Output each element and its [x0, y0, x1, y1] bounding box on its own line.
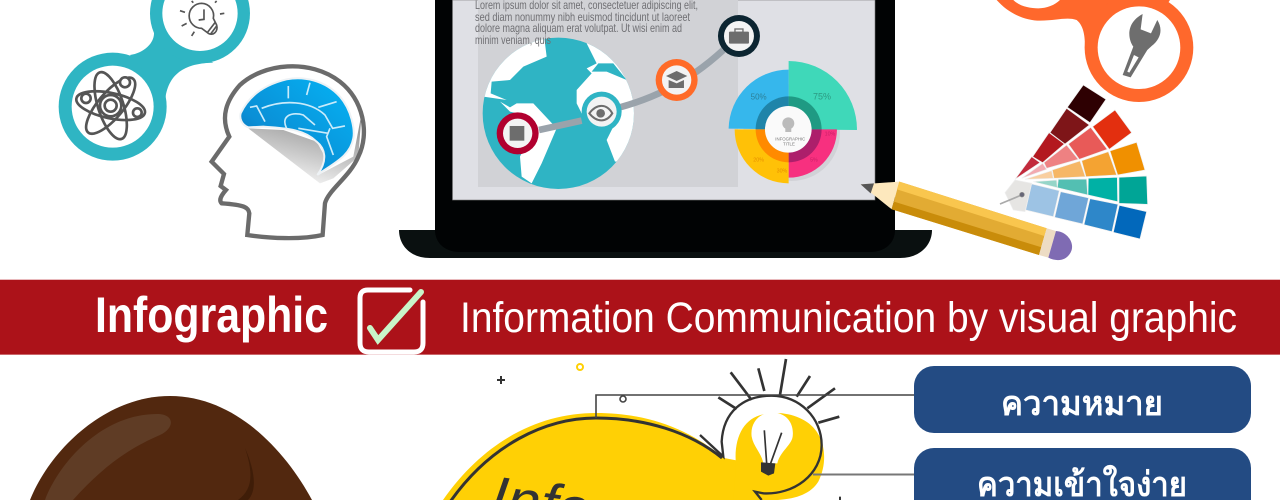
hair: [30, 396, 312, 500]
pie chart: [729, 61, 857, 183]
screen: [452, 0, 875, 200]
head outline: [212, 66, 364, 238]
pie chart: 10%: [825, 132, 836, 138]
pie chart: 5%: [810, 157, 818, 163]
head with brain: [212, 66, 364, 238]
icon: graduation cap: [656, 59, 698, 101]
laptop body: [435, 0, 895, 252]
icon: checkbox: [360, 290, 423, 352]
icon: atom: [72, 66, 154, 148]
icon: wrench: [1123, 14, 1160, 77]
decorative marks: [497, 364, 583, 384]
pencil: [861, 182, 1072, 260]
pie chart: 75%: [813, 92, 831, 102]
connector lines: [596, 395, 915, 474]
lorem text: minim veniam, quis: [475, 33, 551, 47]
pie chart: INFOGRAPHIC: [775, 136, 805, 141]
brain folds: [250, 83, 345, 155]
bubble outline: [450, 418, 722, 500]
pie chart: 50%: [751, 92, 767, 101]
yellow speech bubble with lightbulb: [443, 359, 840, 500]
pie chart: 20%: [753, 157, 764, 163]
hair highlight: [45, 414, 171, 500]
colour swatch fan: [1000, 85, 1148, 239]
lorem text: [475, 0, 698, 47]
pie chart: 30%: [777, 169, 788, 175]
pill: easy to understand: [914, 448, 1251, 500]
icon: briefcase: [718, 15, 760, 57]
lorem text: sed diam nonummy nibh euismod tincidunt ut laoreet: [475, 10, 691, 24]
pill: meaning: ความหมาย: [1001, 385, 1163, 423]
icon: eye: [582, 92, 622, 132]
brain shadow: [248, 113, 362, 183]
lorem text: dolore magna aliquam erat volutpat. Ut wisi enim ad: [475, 21, 682, 35]
bulb: [700, 359, 840, 500]
icon: book: [497, 112, 539, 154]
orange connected circles: [997, 0, 1193, 102]
pie chart: TITLE: [783, 141, 795, 146]
red banner: [0, 279, 1280, 355]
brain: [240, 78, 354, 175]
icon: lightbulb clock: [162, 0, 238, 51]
teal connected circles: [59, 0, 250, 161]
laptop base: [399, 230, 932, 258]
screen panel: [478, 0, 738, 187]
laptop: [399, 0, 932, 258]
banner heading: Infographic: [95, 287, 328, 343]
globe and path: [473, 15, 760, 189]
pill: meaning: [914, 366, 1251, 433]
